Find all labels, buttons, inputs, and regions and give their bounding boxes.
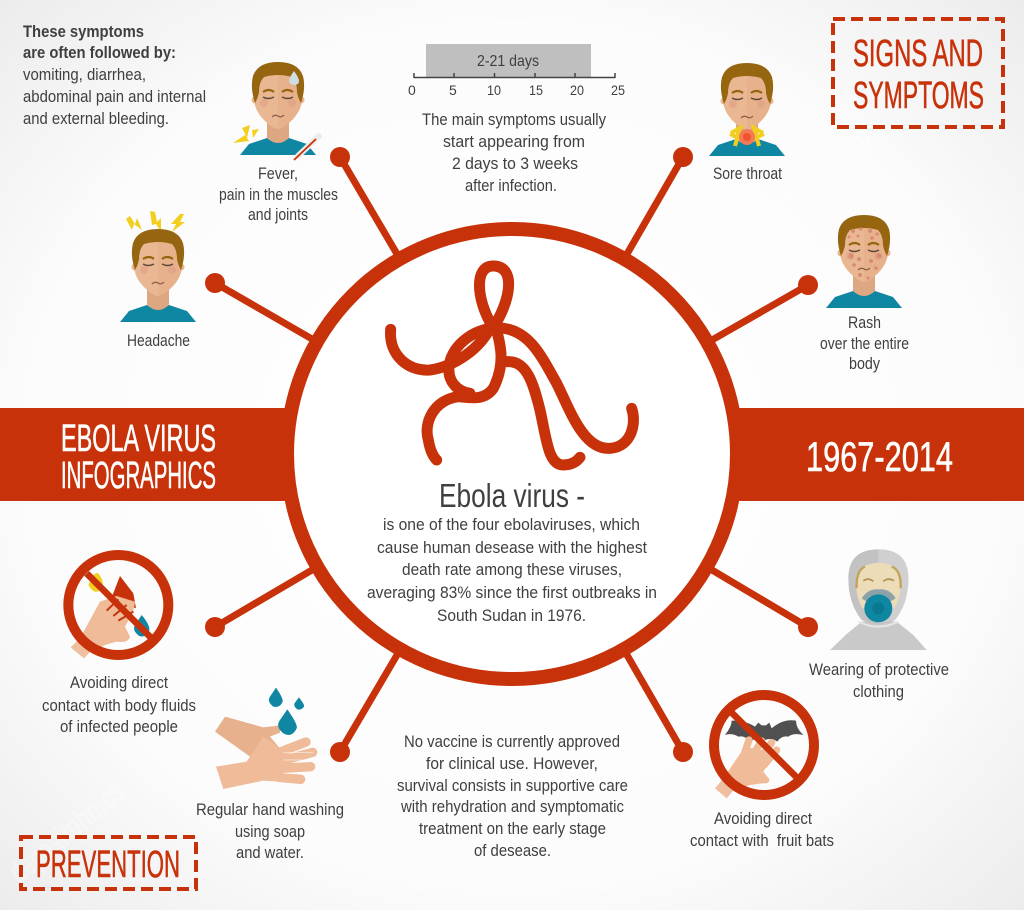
watermark	[1, 109, 890, 890]
chart: incubation timeline	[408, 44, 625, 98]
watermark: depositphotos	[736, 544, 890, 680]
watermark: depositphotos	[736, 109, 890, 245]
text: follow-up symptoms: and external bleeding.	[23, 109, 169, 128]
dates: 1967-2014	[806, 433, 953, 480]
heading: signs and symptoms	[833, 19, 1003, 127]
chart: incubation timeline: 15	[529, 82, 543, 98]
text: ebola virus description: death rate among these viruses,	[402, 560, 622, 579]
watermark: depositphotos	[1, 773, 132, 890]
prevention: avoid body fluids	[42, 555, 196, 736]
text: treatment: survival consists in supportive care	[397, 776, 628, 795]
text: follow-up symptoms: vomiting, diarrhea,	[23, 65, 146, 84]
chart: incubation timeline: 25	[611, 82, 625, 98]
text: ebola virus description	[367, 477, 657, 625]
title: ebola virus infographics: INFOGRAPHICS	[61, 455, 216, 497]
symptom: sore throat	[709, 63, 785, 183]
text: treatment	[397, 732, 628, 860]
title: ebola virus infographics	[61, 418, 216, 497]
text: symptom onset: after infection.	[465, 176, 557, 195]
text: treatment: of desease.	[474, 841, 551, 860]
red banner	[0, 408, 1024, 501]
text: follow-up symptoms	[23, 22, 206, 128]
text: symptom onset: The main symptoms usually	[422, 110, 606, 129]
symptom: headache: Headache	[127, 331, 190, 350]
text: treatment: with rehydration and symptomatic	[400, 797, 624, 816]
symptom: fever	[219, 62, 338, 224]
prevention: hand washing: and water.	[236, 843, 304, 862]
prevention: avoid fruit bats: Avoiding direct	[714, 809, 812, 828]
symptom: rash: Rash	[848, 313, 881, 332]
text: follow-up symptoms: These symptoms	[23, 22, 144, 41]
symptom: headache	[120, 211, 196, 350]
prevention: protective clothing: Wearing of protective	[809, 660, 949, 679]
central circle	[287, 229, 737, 679]
symptom: rash: body	[849, 354, 880, 373]
prevention: avoid body fluids: Avoiding direct	[70, 673, 168, 692]
text: follow-up symptoms: are often followed by:	[23, 43, 176, 62]
text: ebola virus description: averaging 83% since the first outbreaks in	[367, 583, 657, 602]
text: symptom onset: start appearing from	[443, 132, 585, 151]
text: symptom onset: 2 days to 3 weeks	[452, 154, 578, 173]
title: ebola virus infographics: EBOLA VIRUS	[61, 418, 216, 460]
text: ebola virus description: is one of the four ebolaviruses, which	[383, 515, 640, 534]
prevention: avoid body fluids: of infected people	[60, 717, 178, 736]
prevention: protective clothing	[809, 549, 949, 701]
prevention: avoid body fluids: contact with body fluids	[42, 696, 196, 715]
prevention: avoid fruit bats	[690, 695, 834, 850]
watermark: depositphotos	[231, 539, 385, 675]
text: follow-up symptoms: abdominal pain and internal	[23, 87, 206, 106]
chart: incubation timeline: 20	[570, 82, 584, 98]
symptom: rash: over the entire	[820, 334, 909, 353]
prevention: hand washing: Regular hand washing	[196, 800, 344, 819]
prevention: protective clothing: clothing	[853, 682, 904, 701]
heading: prevention	[21, 837, 196, 889]
watermark: depositphotos	[231, 109, 385, 245]
text: treatment: treatment on the early stage	[419, 819, 606, 838]
text: ebola virus description: cause human desease with the highest	[377, 538, 647, 557]
chart: incubation timeline: 0	[408, 82, 416, 98]
text: symptom onset	[422, 110, 606, 195]
text: ebola virus description: Ebola virus -	[439, 477, 585, 514]
symptom: sore throat: Sore throat	[713, 164, 782, 183]
spokes	[205, 147, 818, 762]
prevention: hand washing	[196, 688, 344, 862]
chart: incubation timeline: 2-21 days	[477, 53, 539, 70]
symptom: fever: and joints	[248, 205, 308, 224]
symptom: fever: Fever,	[258, 164, 298, 183]
text: ebola virus description: South Sudan in 1976.	[437, 606, 586, 625]
heading: prevention: PREVENTION	[36, 844, 180, 886]
text: treatment: No vaccine is currently approved	[404, 732, 620, 751]
chart: incubation timeline: 10	[487, 82, 501, 98]
prevention: hand washing: using soap	[235, 822, 305, 841]
text: treatment: for clinical use. However,	[426, 754, 598, 773]
symptom: rash	[820, 215, 909, 373]
symptom: fever: pain in the muscles	[219, 185, 338, 204]
icon: ebola virus	[390, 266, 633, 465]
prevention: avoid fruit bats: contact with fruit bats	[690, 831, 834, 850]
chart: incubation timeline: 5	[449, 82, 457, 98]
